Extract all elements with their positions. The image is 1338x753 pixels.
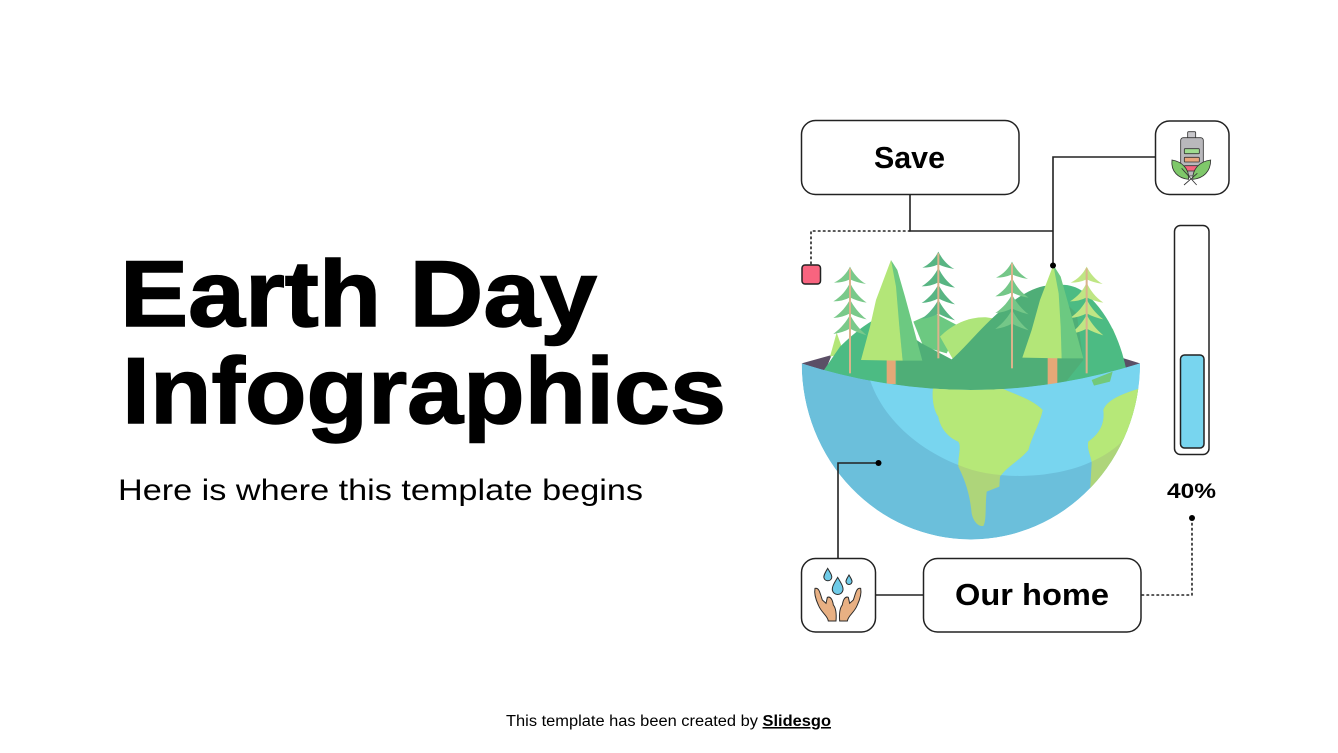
south america shadow — [933, 387, 1043, 526]
percentage connector dot — [1189, 515, 1195, 521]
dark inner wedges — [802, 355, 1140, 372]
red marker square — [802, 265, 820, 284]
title: Infographics — [122, 338, 726, 443]
save box — [802, 120, 1019, 194]
tree connector dot — [1050, 262, 1056, 268]
progress bar — [1174, 226, 1209, 454]
our home box: Our home — [955, 577, 1109, 612]
subtitle: Here is where this template begins — [118, 474, 643, 507]
save box: Save — [874, 140, 945, 175]
title — [120, 241, 726, 443]
small background shrubs — [830, 322, 1123, 360]
footer credit: This template has been created by Slidesgo — [506, 713, 831, 730]
back mountains — [822, 285, 1126, 397]
title: Earth Day — [120, 241, 597, 346]
our home box — [924, 558, 1141, 632]
ocean shadow — [802, 363, 1140, 540]
small island — [1092, 372, 1113, 386]
earth illustration — [802, 252, 1143, 540]
pine trees — [833, 252, 1103, 373]
large tree left — [861, 260, 922, 384]
globe connector dot — [876, 460, 882, 466]
icon: hands and water drops — [802, 558, 876, 632]
lit land — [932, 388, 1138, 475]
ocean light — [870, 353, 1143, 476]
icon: battery with leaves — [1156, 121, 1229, 194]
percentage label: 40% — [1167, 480, 1216, 503]
half globe — [802, 353, 1143, 540]
africa shadow — [1088, 388, 1138, 488]
large tree right — [1022, 265, 1083, 386]
connector lines — [811, 157, 1192, 595]
